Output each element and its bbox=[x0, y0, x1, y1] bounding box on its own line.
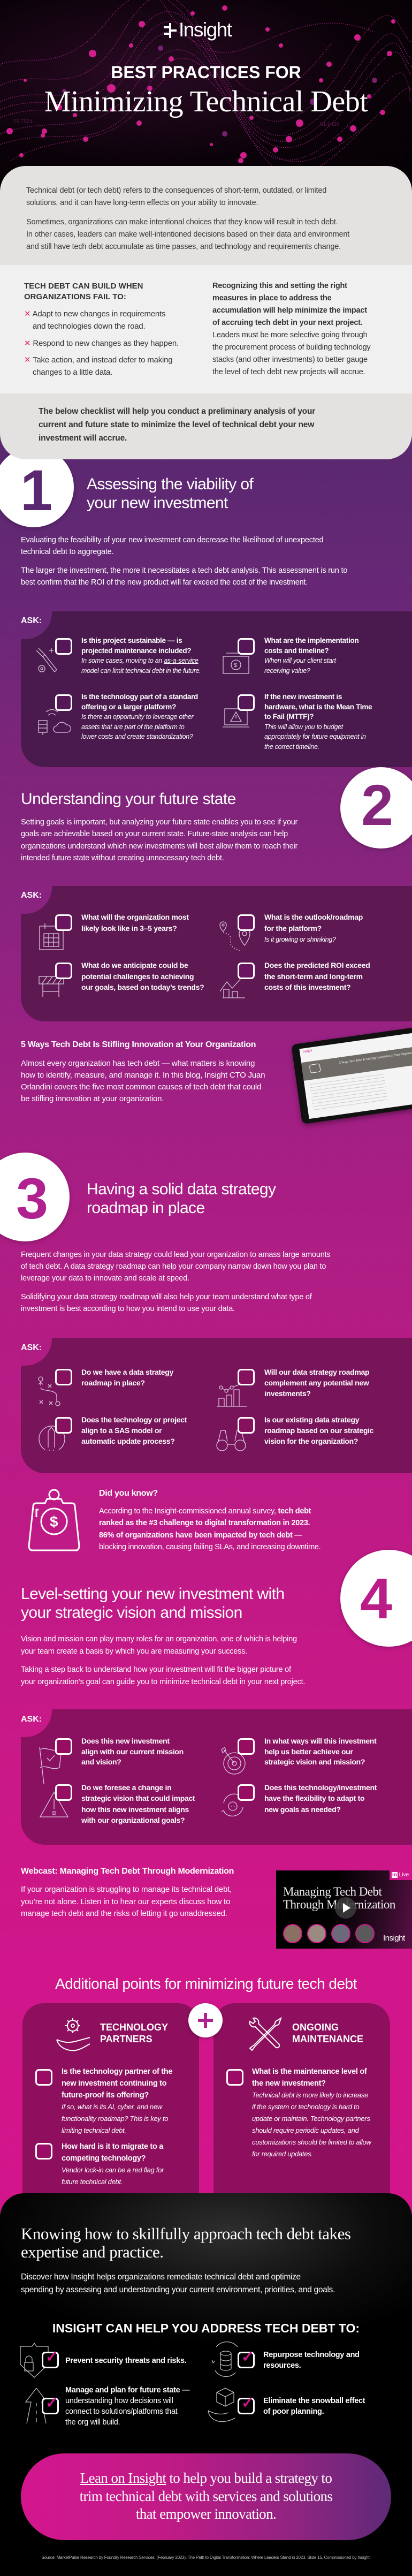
icon: box hand bbox=[207, 2387, 246, 2426]
intro panel: Sometimes, organizations can make intentional choices that they know will result in tech debt. bbox=[26, 218, 338, 226]
section 2 text: intended future state without creating unnecessary tech debt. bbox=[21, 854, 224, 862]
panel: ask 3 bbox=[21, 1338, 412, 1473]
webcast text: you’re not alone. Listen in to hear our experts discuss how to bbox=[21, 1897, 230, 1906]
ask 1 items: costs and timeline? bbox=[264, 647, 329, 654]
section 2 text: organizations understand which new investments will best allow them to reach their bbox=[21, 842, 297, 851]
card: ongoing maintenance: update or maintain. Technology partners bbox=[252, 2115, 370, 2123]
help items: ✓ bbox=[45, 2348, 58, 2365]
closing heading: expertise and practice. bbox=[21, 2242, 164, 2261]
text: ASK: bbox=[21, 891, 42, 900]
card: technology partners: How hard is it to migrate to a bbox=[62, 2142, 163, 2151]
callout: did you know: blocking innovation, causing failing SLAs, and increasing downtime. bbox=[99, 1543, 321, 1551]
ask 2 items: What will the organization most bbox=[81, 913, 189, 921]
card: ongoing maintenance: for required updates. bbox=[252, 2150, 313, 2158]
section 3 text: leverage your data to innovate and scale at speed. bbox=[21, 1274, 189, 1283]
source note: Source: MarketPulse Research by Foundry Research Services. (February 2023). The Path to Digital Transformation: Where Leaders Stand in 2023. Slide 15. Commissioned by Insight. bbox=[42, 2555, 370, 2560]
section 3 heading: roadmap in place bbox=[87, 1199, 205, 1217]
ask 3 items: Will our data strategy roadmap bbox=[264, 1368, 369, 1376]
cta pill: trim technical debt with services and solutions bbox=[80, 2488, 332, 2504]
text: ASK: bbox=[21, 1715, 42, 1724]
cta pill: that empower innovation. bbox=[136, 2506, 276, 2522]
ask 2 items: costs of this investment? bbox=[264, 983, 350, 991]
closing text: spending by assessing and understanding your current environment, priorities, and goals. bbox=[21, 2285, 335, 2294]
ask 2 items: for the platform? bbox=[264, 924, 322, 933]
closing heading bbox=[21, 2224, 350, 2261]
number 3: 3 bbox=[16, 1166, 48, 1231]
closing text bbox=[21, 2271, 335, 2297]
fail list: TECH DEBT CAN BUILD WHEN bbox=[24, 282, 143, 291]
recognizing text bbox=[212, 282, 371, 376]
callout: did you know: According to the Insight-commissioned annual survey, tech debt bbox=[99, 1507, 311, 1516]
icon: barrier bbox=[39, 976, 64, 997]
checklist intro bbox=[39, 407, 316, 443]
5 ways text bbox=[21, 1059, 265, 1103]
callout: did you know bbox=[28, 1489, 321, 1551]
webcast text: If your organization is struggling to manage its technical debt, bbox=[21, 1885, 232, 1894]
ask 2 items: What do we anticipate could be bbox=[81, 961, 188, 969]
card: technology partners bbox=[22, 2003, 199, 2228]
ask 2 items: Does the predicted ROI exceed bbox=[264, 961, 370, 969]
video thumbnail: Managing Tech Debt bbox=[283, 1885, 382, 1898]
card: technology partners: competing technology? bbox=[62, 2154, 146, 2163]
section 4 text: your team create a basis by which you are measuring your success. bbox=[21, 1647, 247, 1655]
help items: Manage and plan for future state — bbox=[65, 2386, 189, 2395]
icon: wrench gear bbox=[36, 648, 57, 672]
section 2 text bbox=[21, 818, 297, 862]
circle 4 bbox=[340, 1550, 412, 1647]
section 4 text bbox=[21, 1635, 297, 1655]
card: technology partners: PARTNERS bbox=[100, 2034, 152, 2044]
ask 1 items: to Fail (MTTF)? bbox=[264, 713, 314, 721]
section 1 heading: Assessing the viability of bbox=[87, 475, 253, 493]
ask 1 items: If the new investment is bbox=[264, 693, 342, 701]
closing heading: Knowing how to skillfully approach tech debt takes bbox=[21, 2224, 350, 2243]
ask 4 items: Does this technology/investment bbox=[264, 1783, 377, 1792]
webcast text: manage tech debt and the risks of letting it go unaddressed. bbox=[21, 1909, 227, 1918]
section 4 heading: Level-setting your new investment with bbox=[21, 1585, 284, 1603]
card: ongoing maintenance: ONGOING bbox=[292, 2022, 339, 2033]
ask 1 items: In some cases, moving to an as-a-service bbox=[81, 657, 199, 664]
recognizing text: measures in place to address the bbox=[212, 294, 331, 302]
title: Minimizing Technical Debt bbox=[44, 85, 368, 118]
card: technology partners: future-proof its offering? bbox=[62, 2091, 149, 2100]
help items: ✓ bbox=[241, 2348, 254, 2365]
intro panel: and still have tech debt accumulate as time passes, and technology and requirements change. bbox=[26, 243, 341, 251]
cta pill bbox=[21, 2453, 391, 2540]
5 ways text: Almost every organization has tech debt — what matters is knowing bbox=[21, 1059, 255, 1068]
recognizing text: Leaders must be more selective going through bbox=[212, 331, 367, 339]
icon: gear hand bbox=[56, 2018, 90, 2051]
ask 3 items: automatic update process? bbox=[81, 1437, 175, 1445]
card: technology partners: future technical debt. bbox=[62, 2178, 123, 2186]
help items: ✓ bbox=[45, 2395, 58, 2411]
section 4 heading: your strategic vision and mission bbox=[21, 1604, 242, 1622]
icon: shield lock bbox=[19, 2342, 49, 2380]
icon: money weight: $ bbox=[50, 1513, 58, 1530]
icon: dollar screen bbox=[223, 653, 249, 674]
card: ongoing maintenance: should require periodic updates, and bbox=[252, 2126, 359, 2134]
webcast heading: Webcast: Managing Tech Debt Through Modernization bbox=[21, 1867, 234, 1876]
ask 3 items: vision for the organization? bbox=[264, 1437, 358, 1445]
circle 1 bbox=[0, 447, 74, 527]
ask 2 items: likely look like in 3–5 years? bbox=[81, 924, 177, 933]
tablet image bbox=[291, 1027, 412, 1124]
icon: plus circle bbox=[188, 2003, 223, 2037]
ask 4 items: Does this new investment bbox=[81, 1737, 170, 1745]
ask 1 items: hardware, what is the Mean Time bbox=[264, 702, 372, 711]
ask 2 items: What is the outlook/roadmap bbox=[264, 913, 363, 921]
ask 4 items: help us better achieve our bbox=[264, 1747, 353, 1756]
icon: binoculars bbox=[216, 1430, 246, 1451]
card: ongoing maintenance bbox=[213, 2003, 390, 2228]
icon: calendar bbox=[39, 923, 64, 950]
help items: understanding how decisions will bbox=[65, 2397, 173, 2405]
ask 3 items: investments? bbox=[264, 1389, 311, 1398]
text: best confirm that the ROI of the new product will far exceed the cost of the investment. bbox=[21, 578, 308, 587]
card: technology partners: limiting technical debt. bbox=[62, 2126, 126, 2134]
icon: cloud server bbox=[38, 709, 71, 735]
number 1: 1 bbox=[20, 458, 52, 522]
closing text: Discover how Insight helps organizations remediate technical debt and optimize bbox=[21, 2272, 301, 2282]
recognizing text: Recognizing this and setting the right bbox=[212, 282, 347, 290]
section 1 text bbox=[21, 536, 323, 556]
video thumbnail: in Live bbox=[392, 1872, 409, 1878]
ask 4 items: Do we foresee a change in bbox=[81, 1783, 171, 1792]
ask 4 items: with our organizational goals? bbox=[81, 1816, 185, 1824]
section 3 text: Frequent changes in your data strategy could lead your organization to amass large amounts bbox=[21, 1251, 330, 1259]
ask 1 items: When will your client start bbox=[264, 657, 336, 664]
intro text: Technical debt (or tech debt) refers to the consequences of short-term, outdated, or limited bbox=[26, 186, 326, 195]
help items bbox=[16, 2340, 396, 2429]
panel: ask 4 bbox=[21, 1709, 412, 1845]
card: technology partners: Is the technology partner of the bbox=[62, 2067, 172, 2076]
icon: flag bbox=[39, 1747, 61, 1784]
number 4: 4 bbox=[360, 1566, 392, 1631]
video thumbnail: Insight bbox=[383, 1934, 405, 1943]
icon: cycle bbox=[222, 1793, 243, 1817]
ask 4 items bbox=[39, 1737, 377, 1824]
title: BEST PRACTICES FOR bbox=[111, 63, 301, 82]
ask 1 items: projected maintenance included? bbox=[81, 647, 191, 654]
card: technology partners: new investment continuing to bbox=[62, 2079, 166, 2088]
fail list: ✕ Respond to new changes as they happen. bbox=[24, 339, 179, 348]
text: The larger the investment, the more it necessitates a tech debt analysis. This assessment is run to bbox=[21, 566, 347, 575]
card: technology partners: Vendor lock-in can be a red flag for bbox=[62, 2166, 164, 2174]
circle 3 bbox=[0, 1153, 70, 1241]
ask 1 items: What are the implementation bbox=[264, 637, 358, 645]
text: your organization’s goal can guide you to minimize technical debt in your next project. bbox=[21, 1678, 305, 1686]
icon: dollar screen: $ bbox=[234, 662, 237, 669]
ask 1 items: offering or a larger platform? bbox=[81, 702, 176, 711]
card: ongoing maintenance: Technical debt is more likely to increase bbox=[252, 2091, 368, 2099]
section 4 heading bbox=[21, 1585, 284, 1622]
fail list: and technologies down the road. bbox=[33, 322, 146, 331]
ask 3 items bbox=[38, 1368, 373, 1451]
ask 4 items: how this new investment aligns bbox=[81, 1805, 189, 1814]
ask 2 items: Is it growing or shrinking? bbox=[264, 936, 336, 943]
ask 2 items bbox=[39, 913, 370, 998]
card: ongoing maintenance: What is the maintenance level of bbox=[252, 2067, 367, 2076]
text: Taking a step back to understand how your investment will fit the bigger picture of bbox=[21, 1665, 291, 1674]
recognizing text: of accruing tech debt in your next project. bbox=[212, 319, 363, 327]
ask 1 items bbox=[36, 637, 372, 751]
fail list: ✕ Adapt to new changes in requirements bbox=[24, 309, 165, 319]
text: investment is best according to how you intend to use your data. bbox=[21, 1305, 235, 1313]
ask 3 items: roadmap in place? bbox=[81, 1378, 145, 1387]
section 1 heading bbox=[87, 475, 254, 512]
webcast text bbox=[21, 1885, 232, 1918]
card: ongoing maintenance: MAINTENANCE bbox=[292, 2034, 363, 2044]
ask 3 items: align to a SAS model or bbox=[81, 1426, 162, 1435]
help items: the org will build. bbox=[65, 2418, 120, 2427]
5 ways text: Orlandini covers the five most common causes of tech debt that could bbox=[21, 1082, 261, 1092]
card: technology partners: If so, what is its AI, cyber, and new bbox=[62, 2103, 162, 2111]
icon: laptop warning bbox=[223, 708, 249, 728]
ask 4 items: have the flexibility to adapt to bbox=[264, 1794, 364, 1802]
section 3 heading bbox=[87, 1180, 276, 1217]
ask 4 items: strategic vision that could impact bbox=[81, 1794, 195, 1802]
card: ongoing maintenance: customizations should be limited to allow bbox=[252, 2138, 371, 2146]
panel: ask 2 bbox=[21, 886, 412, 1021]
fail list: ORGANIZATIONS FAIL TO: bbox=[24, 292, 126, 301]
intro text bbox=[26, 186, 326, 207]
logo: Insight bbox=[179, 19, 232, 41]
section 2 text: goals are achievable based on your current state. Future-state analysis can help bbox=[21, 830, 288, 838]
icon: database cycle bbox=[209, 2342, 241, 2379]
ask 1 items: Is there an opportunity to leverage other bbox=[81, 713, 193, 721]
icon: road arrow bbox=[21, 2387, 50, 2426]
help items: connect to solutions/platforms that bbox=[65, 2407, 178, 2416]
5 ways text: be stifling innovation at your organization. bbox=[21, 1094, 164, 1103]
ask 4 items: align with our current mission bbox=[81, 1747, 184, 1756]
ask 1 items: This will allow you to budget bbox=[264, 723, 343, 730]
ask 3 items: roadmap based on our strategic bbox=[264, 1426, 373, 1435]
5 ways text: how to identify, measure, and manage it. In this blog, Insight CTO Juan bbox=[21, 1071, 265, 1080]
ask 1 items: Is the technology part of a standard bbox=[81, 693, 198, 701]
ask 3 items: complement any potential new bbox=[264, 1378, 369, 1387]
card: technology partners: functionality roadmap? This is key to bbox=[62, 2115, 168, 2123]
ask 1 items: assets that are part of the platform to bbox=[81, 723, 185, 730]
number 2: 2 bbox=[361, 772, 393, 837]
cta pill: Lean on Insight to help you build a strategy to bbox=[80, 2470, 332, 2486]
video thumbnail bbox=[276, 1870, 412, 1949]
icon: playbook bbox=[38, 1376, 60, 1406]
help items: Eliminate the snowball effect bbox=[263, 2397, 365, 2405]
text: Solidifying your data strategy roadmap will also help your team understand what type of bbox=[21, 1293, 312, 1301]
hero background: 25.7524 bbox=[13, 119, 33, 125]
section 3 text bbox=[21, 1251, 331, 1283]
card: technology partners: TECHNOLOGY bbox=[100, 2022, 168, 2033]
icon: map pins bbox=[219, 921, 250, 951]
icon: growth chart bbox=[219, 979, 245, 998]
checklist intro: investment will accrue. bbox=[39, 434, 127, 443]
text: ASK: bbox=[21, 616, 42, 625]
recognizing text: the procurement process of building technology bbox=[212, 343, 370, 352]
ask 3 items: Does the technology or project bbox=[81, 1415, 187, 1424]
ask 1 items: Is this project sustainable — is bbox=[81, 637, 182, 645]
card: ongoing maintenance: the new investment? bbox=[252, 2079, 326, 2088]
dark closing section bbox=[0, 2193, 412, 2576]
section 2 text: Setting goals is important, but analyzing your future state enables you to see if your bbox=[21, 818, 297, 827]
ask 2 items: our goals, based on today’s trends? bbox=[81, 983, 204, 991]
tablet image: Insight bbox=[303, 1049, 312, 1054]
recognizing text: the level of tech debt new projects will accrue. bbox=[212, 368, 365, 376]
section 4 text: Vision and mission can play many roles for an organization, one of which is helping bbox=[21, 1635, 297, 1643]
ask 4 items: strategic vision and mission? bbox=[264, 1757, 365, 1766]
icon: warning bbox=[40, 1791, 68, 1817]
icon: upload circle bbox=[39, 1426, 65, 1451]
section 3 heading: Having a solid data strategy bbox=[87, 1180, 276, 1198]
recognizing text: accumulation will help minimize the impact bbox=[212, 306, 367, 315]
icon: wrench screwdriver bbox=[249, 2017, 282, 2051]
recognizing text: stacks (and other investments) to better gauge bbox=[212, 355, 368, 364]
section 2 heading: Understanding your future state bbox=[21, 790, 236, 808]
section 1 heading: your new investment bbox=[87, 494, 228, 512]
fail list: ✕ Take action, and instead defer to making bbox=[24, 355, 172, 365]
ask 1 items: receiving value? bbox=[264, 667, 310, 675]
help items: Prevent security threats and risks. bbox=[65, 2357, 186, 2365]
text: ASK: bbox=[21, 1343, 42, 1352]
hero background: 91.9426 bbox=[320, 122, 340, 127]
callout: did you know: Did you know? bbox=[99, 1489, 158, 1498]
insight can help heading: INSIGHT CAN HELP YOU ADDRESS TECH DEBT TO: bbox=[52, 2321, 360, 2335]
checklist intro: The below checklist will help you conduct a preliminary analysis of your bbox=[39, 407, 315, 416]
section 1 text: technical debt to aggregate. bbox=[21, 548, 113, 556]
panel: ask 1 bbox=[21, 611, 412, 767]
callout: did you know: 86% of organizations have been impacted by tech debt — bbox=[99, 1531, 302, 1540]
help items: Repurpose technology and bbox=[263, 2351, 360, 2359]
additional points heading: Additional points for minimizing future tech debt bbox=[55, 1975, 357, 1992]
ask 3 items: Do we have a data strategy bbox=[81, 1368, 173, 1376]
icon: money weight bbox=[28, 1489, 80, 1551]
light band bbox=[0, 265, 412, 393]
intro panel bbox=[0, 166, 412, 459]
icon: target bbox=[221, 1747, 246, 1775]
callout: did you know: ranked as the #3 challenge to digital transformation in 2023. bbox=[99, 1519, 310, 1527]
ask 1 items: the correct timeline. bbox=[264, 743, 319, 751]
icon: bar line chart bbox=[217, 1384, 247, 1407]
ask 2 items: the short-term and long-term bbox=[264, 972, 363, 981]
ask 4 items: In what ways will this investment bbox=[264, 1737, 377, 1745]
ask 2 items: potential challenges to achieving bbox=[81, 972, 194, 981]
circle 2 bbox=[340, 767, 412, 848]
ask 4 items: new goals as needed? bbox=[264, 1805, 341, 1814]
checklist intro: current and future state to minimize the level of technical debt your new bbox=[39, 420, 314, 429]
help items: resources. bbox=[263, 2361, 301, 2370]
title bbox=[44, 63, 368, 118]
section 1 text: Evaluating the feasibility of your new investment can decrease the likelihood of unexpected bbox=[21, 536, 323, 544]
5 ways heading: 5 Ways Tech Debt Is Stifling Innovation at Your Organization bbox=[21, 1040, 256, 1049]
fail list bbox=[24, 282, 179, 377]
ask 3 items: Is our existing data strategy bbox=[264, 1415, 359, 1424]
card: ongoing maintenance: if the system or technology is hard to bbox=[252, 2103, 359, 2111]
section 3 text: of tech debt. A data strategy roadmap can help your company narrow down how you plan to bbox=[21, 1262, 326, 1271]
video thumbnail: Through Modernization bbox=[283, 1898, 395, 1911]
intro text: solutions, and it can have long-term effects on your ability to innovate. bbox=[26, 199, 258, 207]
ask 1 items: lower costs and create standardization? bbox=[81, 733, 193, 740]
help items: ✓ bbox=[241, 2395, 254, 2411]
ask 1 items: appropriately for future equipment in bbox=[264, 733, 366, 740]
ask 1 items: model can limit technical debt in the future. bbox=[81, 667, 201, 675]
intro panel: In other cases, leaders can make well-intentioned decisions based on their data and environment bbox=[26, 230, 349, 239]
help items: of poor planning. bbox=[263, 2407, 324, 2416]
fail list: changes to a little data. bbox=[33, 368, 112, 377]
hero background bbox=[0, 0, 412, 182]
ask 4 items: and vision? bbox=[81, 1757, 121, 1766]
purple gradient background bbox=[0, 428, 412, 2248]
